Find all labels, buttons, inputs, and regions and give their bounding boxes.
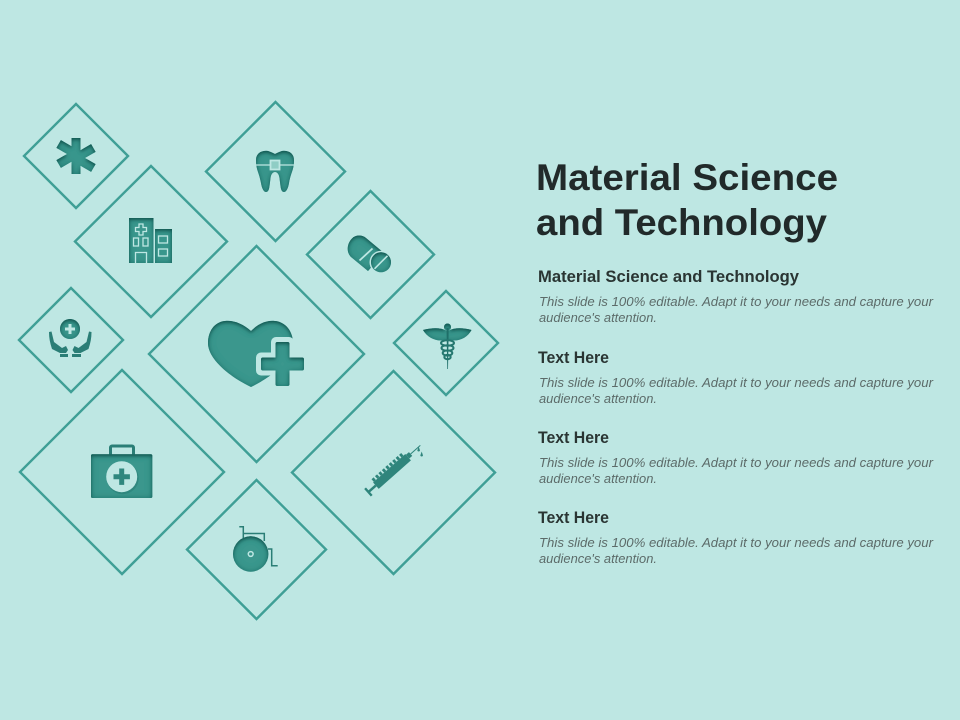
text block 1: This slide is 100% editable. Adapt it to your needs and capture your xyxy=(539,294,934,309)
diamond: pill xyxy=(307,191,434,318)
diamond: syringe xyxy=(292,371,495,574)
panel: diamond icon cluster xyxy=(19,102,498,619)
diamond: tooth xyxy=(206,102,345,241)
text block 4: This slide is 100% editable. Adapt it to your needs and capture your xyxy=(539,535,934,550)
diamond: caring hands xyxy=(19,288,123,392)
text block 3: audience's attention. xyxy=(539,471,657,486)
icon: wheelchair xyxy=(233,527,278,572)
text block 4 xyxy=(538,509,934,566)
text block 3: This slide is 100% editable. Adapt it to your needs and capture your xyxy=(539,455,934,470)
text block 1 xyxy=(538,268,934,325)
text block 4: Text Here xyxy=(538,509,609,527)
text block 3 xyxy=(538,429,934,486)
text block 3: Text Here xyxy=(538,429,609,447)
icon: heart with plus xyxy=(208,321,304,387)
diamond: first aid kit xyxy=(20,370,224,574)
icon: caduceus xyxy=(423,324,472,369)
title: Material Science xyxy=(536,157,838,198)
diamond: wheelchair xyxy=(187,480,326,619)
icon: asterisk xyxy=(56,138,96,174)
text block 2 xyxy=(538,349,934,406)
panel: text column xyxy=(536,157,934,566)
text block 1: audience's attention. xyxy=(539,310,657,325)
icon: syringe xyxy=(363,440,424,497)
icon: capsule and tablet xyxy=(348,236,392,274)
title xyxy=(536,157,838,243)
icon: hands holding medical cross xyxy=(49,319,92,357)
diamond: heart xyxy=(149,246,364,462)
icon: hospital buildings xyxy=(129,218,172,263)
text block 1: Material Science and Technology xyxy=(538,268,800,286)
icon: tooth with braces xyxy=(256,151,294,192)
diamond: caduceus xyxy=(394,291,498,395)
diamond: asterisk xyxy=(24,104,128,208)
text block 2: This slide is 100% editable. Adapt it to your needs and capture your xyxy=(539,375,934,390)
diamond: hospital xyxy=(75,166,227,317)
icon: first aid briefcase xyxy=(91,446,152,498)
text block 4: audience's attention. xyxy=(539,551,657,566)
text block 2: Text Here xyxy=(538,349,609,367)
title: and Technology xyxy=(536,202,827,243)
text block 2: audience's attention. xyxy=(539,391,657,406)
